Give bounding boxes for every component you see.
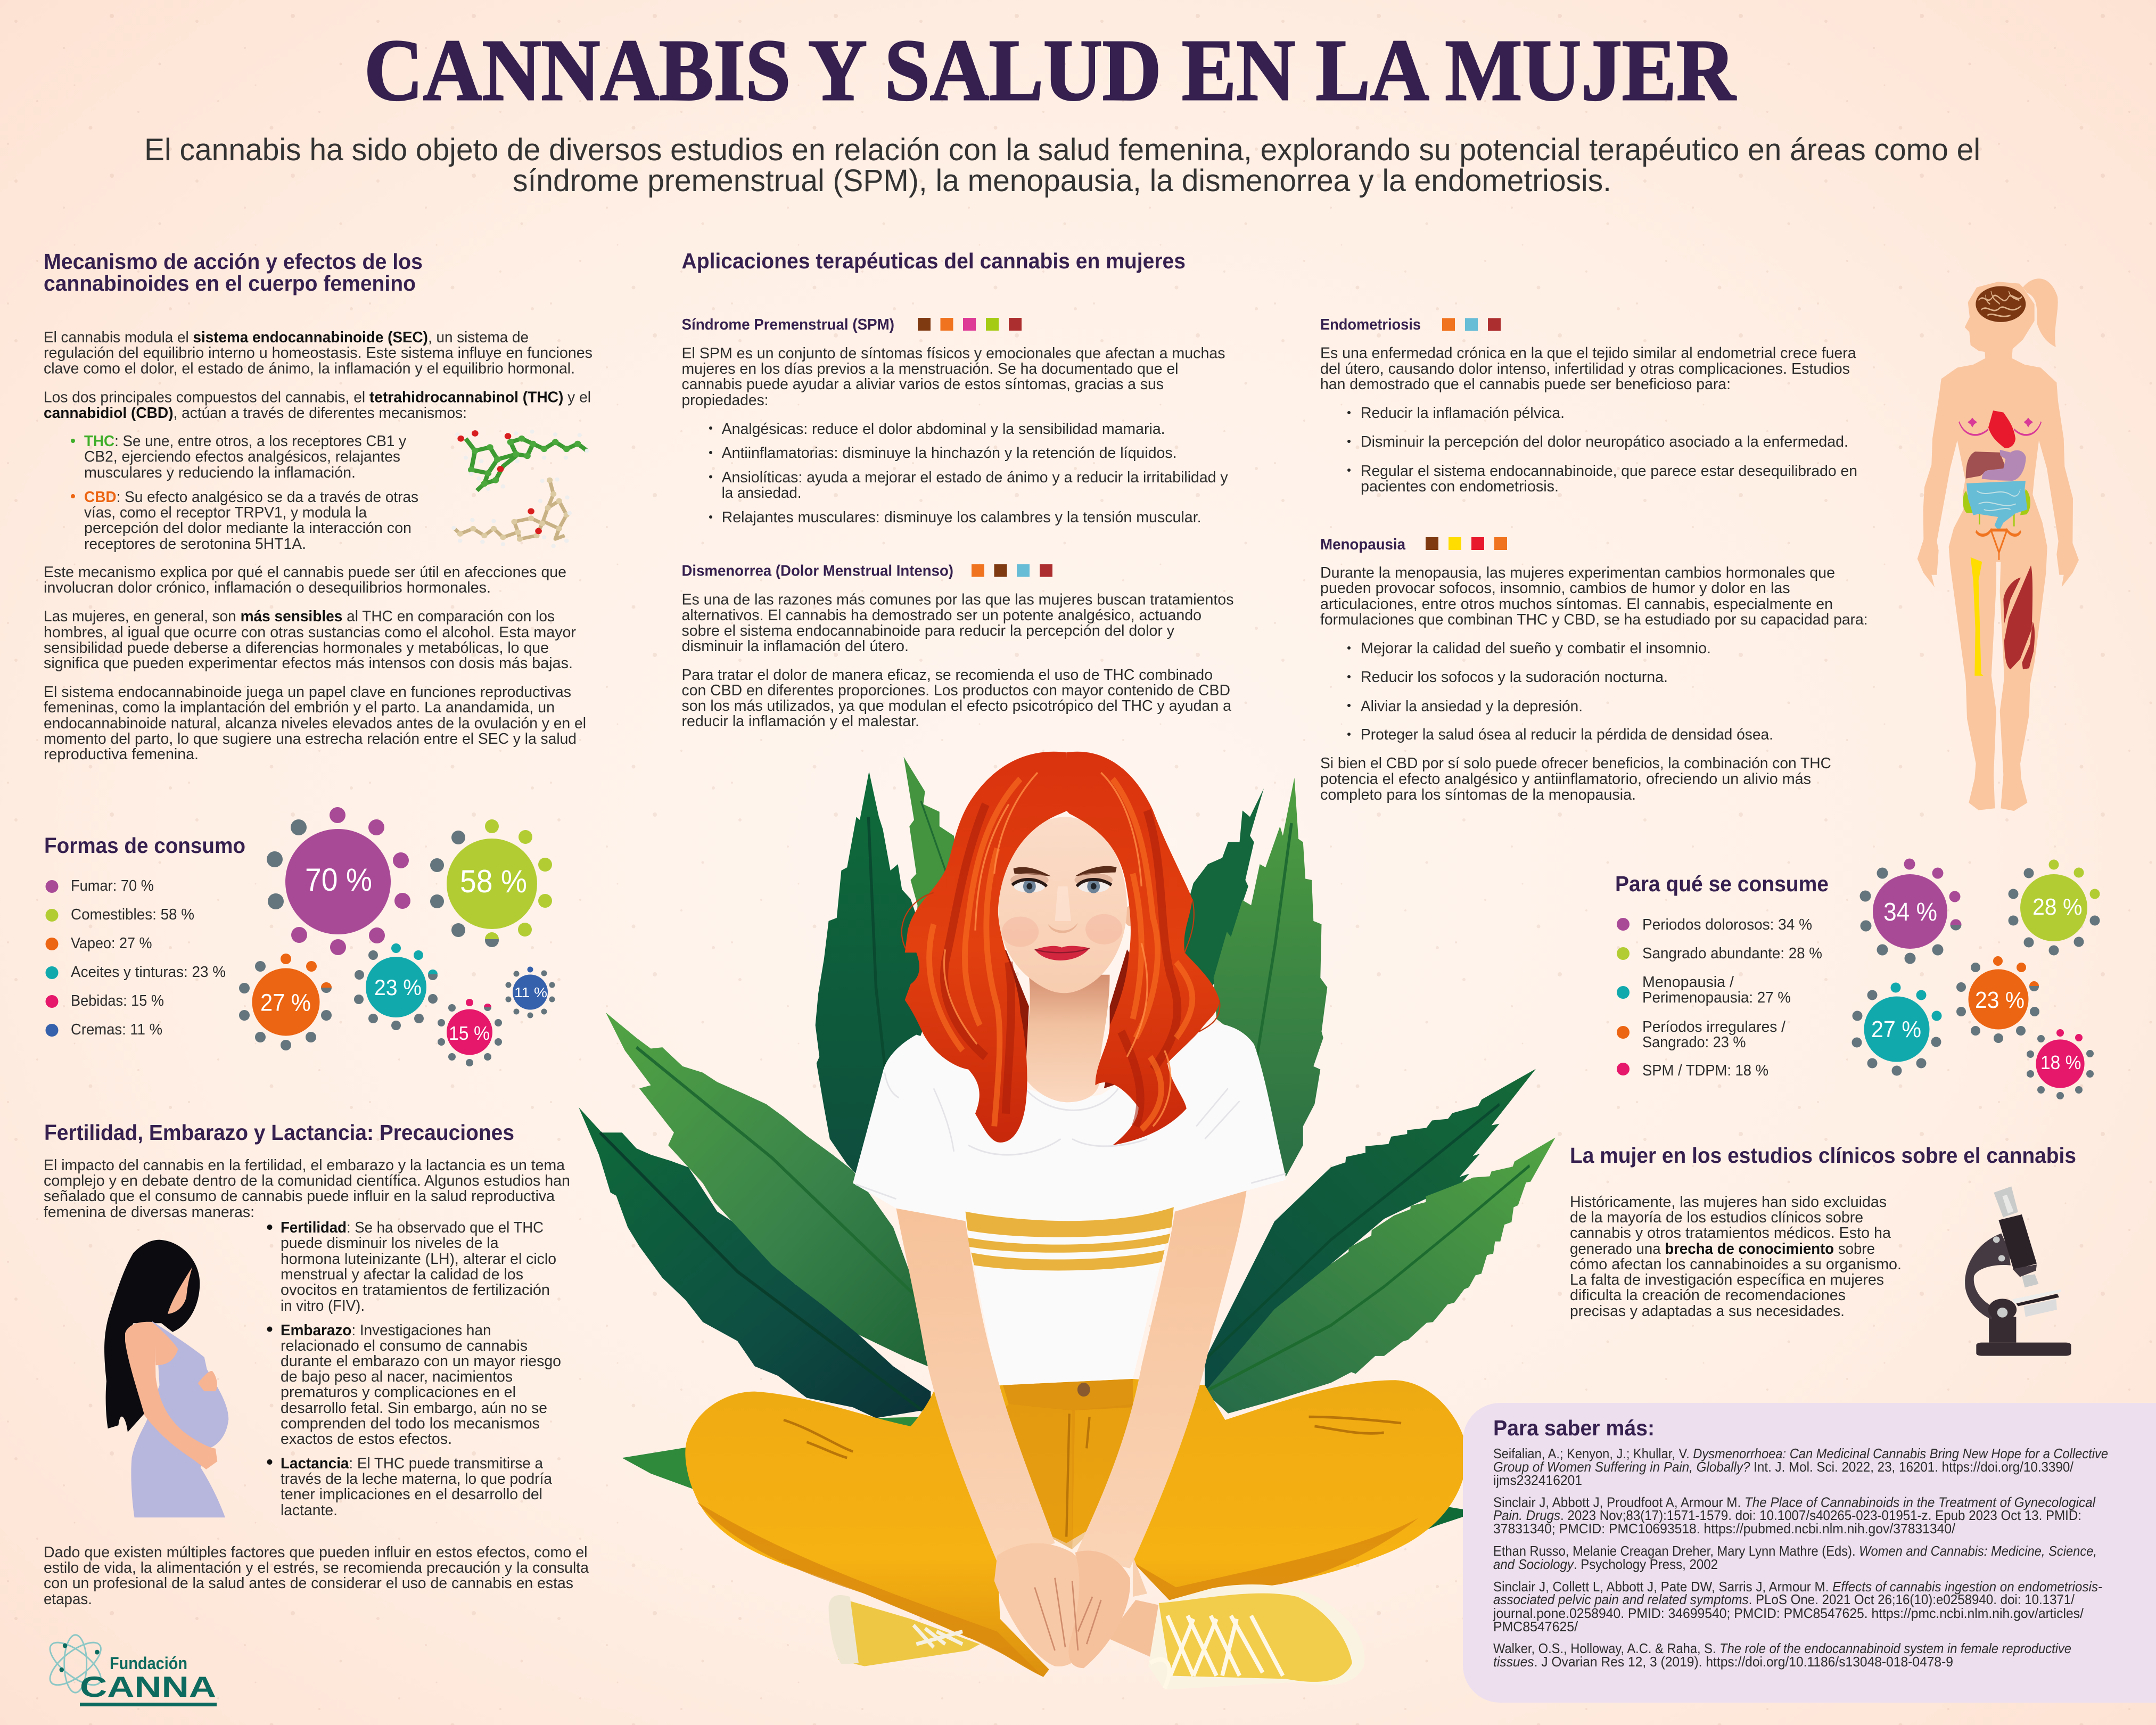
- list: Reducir los sofocos y la sudoración nocturna.: [1361, 669, 1668, 686]
- legend: Aceites y tinturas: 23 %: [71, 964, 226, 981]
- reference 4: journal.pone.0258940. PMID: 34699540; PMCID: PMC8547625. https://pmc.ncbi.nlm.nih.gov/articles/: [1493, 1605, 2084, 1621]
- heading: La mujer en los estudios clínicos sobre el cannabis: [1570, 1143, 2076, 1168]
- reference 2: [1493, 1494, 2096, 1537]
- text block: intro: El cannabis modula el sistema endocannabinoide (SEC), un sistema de: [44, 329, 529, 346]
- thigh muscles: [2003, 565, 2035, 669]
- bubble: 23 %: [1956, 956, 2039, 1043]
- femur: [1971, 557, 1984, 676]
- subtitle: síndrome premenstrual (SPM), la menopausia, la dismenorrea y la endometriosis.: [513, 163, 1611, 198]
- legend: SPM / TDPM: 18 %: [1642, 1062, 1768, 1079]
- bullet: Embarazo: desarrollo fetal. Sin embargo, aún no se: [281, 1400, 547, 1417]
- icon: microscope: [1965, 1186, 2071, 1356]
- lips: [1035, 946, 1090, 960]
- text block: [681, 591, 1234, 730]
- text block: reducir la inflamación y el malestar.: [681, 713, 919, 730]
- bullet: THC: musculares y reduciendo la inflamación.: [84, 464, 356, 481]
- list: Relajantes musculares: disminuye los calambres y la tensión muscular.: [722, 509, 1202, 526]
- text block: intro: [44, 1157, 570, 1221]
- hands: [994, 1543, 1130, 1668]
- leaf: dark upper left: [816, 771, 922, 1177]
- legend: Fumar: 70 %: [71, 877, 154, 894]
- reproductive organs: [1976, 530, 2021, 560]
- text block: de la mayoría de los estudios clínicos sobre: [1570, 1209, 1863, 1226]
- text block: intro: clave como el dolor, el estado de ánimo, la inflamación y el equilibrio hormonal.: [44, 360, 575, 377]
- text block: La falta de investigación específica en mujeres: [1570, 1271, 1884, 1288]
- kidneys: [1963, 489, 2030, 527]
- text block: recommendation: etapas.: [44, 1591, 92, 1608]
- reference 2: 37831340; PMCID: PMC10693518. https://pubmed.ncbi.nlm.nih.gov/37831340/: [1493, 1521, 1956, 1537]
- bubble: 27 %: [1851, 983, 1942, 1075]
- stomach: [1982, 450, 2026, 481]
- bullet: Embarazo: exactos de estos efectos.: [281, 1431, 452, 1448]
- brain: [1976, 286, 2026, 322]
- bubble: 28 %: [2008, 859, 2100, 955]
- reference 2: Sinclair J, Abbott J, Proudfoot A, Armour M. The Place of Cannabinoids in the Treatment of Gynecological: [1493, 1494, 2096, 1510]
- bullet: CBD: [71, 489, 418, 553]
- bubble: 70 %: 70 %: [305, 862, 372, 898]
- bullet: Fertilidad: [267, 1219, 556, 1315]
- list: Proteger la salud ósea al reducir la pérdida de densidad ósea.: [1361, 726, 1773, 743]
- text block: [681, 345, 1225, 409]
- heading: Para qué se consume: [1615, 872, 1829, 896]
- bullet: Fertilidad: menstrual y afectar la calidad de los: [281, 1266, 523, 1283]
- panel: forms of consumption: [44, 807, 555, 1066]
- text block: closing: [1320, 755, 1831, 803]
- text block: closing paragraphs: reproductiva femenina.: [44, 746, 199, 763]
- list: Reducir la inflamación pélvica.: [1361, 405, 1565, 422]
- text block: Durante la menopausia, las mujeres experimentan cambios hormonales que: [1320, 564, 1835, 581]
- legend: Vapeo: 27 %: [71, 935, 152, 952]
- bullet: Embarazo: comprenden del todo los mecanismos: [281, 1415, 540, 1432]
- text block: cómo afectan los cannabinoides a su organismo.: [1570, 1256, 1902, 1273]
- text block: intro: cannabidiol (CBD), actúan a través de diferentes mecanismos:: [44, 405, 467, 422]
- cheeks: [1002, 917, 1039, 947]
- text block: closing paragraphs: [44, 564, 586, 763]
- bubble: 23 %: 23 %: [1975, 987, 2025, 1013]
- panel: endometriosis: [1320, 316, 1857, 495]
- text block: closing paragraphs: femeninas, como la implantación del embrión y el parto. La anandamida, un: [44, 699, 555, 716]
- list: Antiinflamatorias: disminuye la hinchazón y la retención de líquidos.: [722, 445, 1177, 462]
- bullet: Fertilidad: ovocitos en tratamientos de fertilización: [281, 1282, 550, 1299]
- illustration: pregnant woman: [104, 1240, 228, 1517]
- subtitle: El cannabis ha sido objeto de diversos estudios en relación con la salud femenina, explorando su potencial terapéutico en áreas como el: [144, 133, 1980, 167]
- heading: [44, 249, 423, 295]
- panel: dysmenorrhea: [681, 563, 1234, 730]
- central illustration: cannabis leaves and seated woman: [579, 752, 1556, 1690]
- bullet: Embarazo: relacionado el consumo de cannabis: [281, 1337, 528, 1354]
- pants: [685, 1379, 1468, 1677]
- bubble: 34 %: 34 %: [1883, 898, 1937, 926]
- bubble: 58 %: [430, 819, 552, 947]
- list: [709, 421, 1228, 526]
- right leaves: [1205, 1069, 1556, 1544]
- heading: Formas de consumo: [44, 833, 245, 858]
- legend squares: [972, 564, 1052, 577]
- text block: Es una enfermedad crónica en la que el tejido similar al endometrial crece fuera: [1320, 345, 1856, 362]
- small leaves near the knees: [622, 1447, 694, 1490]
- ponytail: [2023, 278, 2058, 347]
- text block: recommendation: con un profesional de la salud antes de considerar el uso de cannabis en estas: [44, 1575, 573, 1592]
- bullet: CBD: percepción del dolor mediante la interacción con: [84, 520, 412, 537]
- icon: THC molecule: [455, 430, 589, 491]
- reference 1: Seifalian, A.; Kenyon, J.; Khullar, V. Dysmenorrhoea: Can Medicinal Cannabis Bring New Hope for a Collective: [1493, 1445, 2108, 1461]
- leaf: dark upper right: [1182, 788, 1264, 987]
- intestines: [1966, 481, 2027, 531]
- logo: Fundación CANNA: [44, 1635, 217, 1706]
- legend squares: [1442, 318, 1501, 331]
- legend: [1617, 916, 1822, 1079]
- text block: closing paragraphs: El sistema endocannabinoide juega un papel clave en funciones reproductivas: [44, 684, 571, 701]
- text block: intro: complejo y en debate dentro de la comunidad científica. Algunos estudios han: [44, 1172, 570, 1189]
- legend: Sangrado: 23 %: [1642, 1034, 1746, 1051]
- text block: pueden provocar sofocos, insomnio, cambios de humor y dolor en las: [1320, 580, 1790, 597]
- bullet: Fertilidad: hormona luteinizante (LH), alterar el ciclo: [281, 1251, 556, 1268]
- reference 1: Group of Women Suffering in Pain, Globally? Int. J. Mol. Sci. 2022, 23, 16201. https://doi.org/10.3390/: [1493, 1459, 2074, 1475]
- reference 3: and Sociology. Psychology Press, 2002: [1493, 1556, 1718, 1572]
- text block: closing: potencia el efecto analgésico y antiinflamatorio, ofreciendo un alivio más: [1320, 771, 1811, 788]
- heading: Mecanismo de acción y efectos de los: [44, 249, 423, 274]
- bullet: Lactancia: tener implicaciones en el desarrollo del: [281, 1486, 542, 1503]
- bullet: Fertilidad: in vitro (FIV).: [281, 1297, 365, 1315]
- legend: Perimenopausia: 27 %: [1642, 989, 1791, 1006]
- text block: intro: regulación del equilibrio interno u homeostasis. Este sistema influye en funciones: [44, 344, 593, 362]
- face: [988, 817, 1135, 993]
- list: Analgésicas: reduce el dolor abdominal y la sensibilidad mamaria.: [722, 421, 1165, 438]
- body silhouette: [1918, 282, 2079, 811]
- bullet: Embarazo: de bajo peso al nacer, nacimientos: [281, 1368, 513, 1385]
- list: [1347, 640, 1773, 743]
- icon: CBD molecule: [451, 478, 572, 548]
- panel: fertility, pregnancy and lactation: [44, 1120, 589, 1608]
- list: Regular el sistema endocannabinoide, que parece estar desequilibrado en: [1361, 463, 1857, 480]
- bubble: 15 %: 15 %: [449, 1022, 490, 1044]
- illustration: female body with organs: [1918, 278, 2079, 811]
- hair right: [1066, 752, 1220, 1145]
- bubble: 58 %: 58 %: [460, 864, 527, 899]
- legend: [46, 877, 226, 1038]
- leaf: dark lower left: [579, 1107, 931, 1418]
- shirt: [853, 1022, 1286, 1385]
- logo: Fundación CANNA: CANNA: [80, 1670, 216, 1703]
- liver: [1966, 451, 2006, 479]
- list: [1347, 405, 1857, 495]
- bubble: 23 %: 23 %: [374, 975, 422, 1000]
- reference 4: [1493, 1579, 2102, 1634]
- leaf: mid green upper right: [1214, 778, 1327, 1177]
- subtitle: [144, 133, 1980, 198]
- right shoe: [1148, 1584, 1364, 1690]
- text block: articulaciones, entre otros muchos síntomas. El cannabis, especialmente en: [1320, 596, 1833, 613]
- bubble: 23 %: [354, 943, 438, 1030]
- list: la ansiedad.: [722, 484, 802, 502]
- bullet: Fertilidad: puede disminuir los niveles de la: [281, 1235, 499, 1252]
- bubble: 70 %: [267, 807, 410, 955]
- text block: closing paragraphs: involucran dolor crónico, inflamación o desequilibrios hormonales.: [44, 579, 491, 596]
- arms: [896, 1209, 1055, 1562]
- text block: sobre el sistema endocannabinoide para reducir la percepción del dolor y: [681, 622, 1174, 639]
- heading: cannabinoides en el cuerpo femenino: [44, 271, 416, 295]
- eyes: [1014, 880, 1045, 893]
- bubble: 27 %: 27 %: [260, 989, 311, 1016]
- bullet: Embarazo: Embarazo: Investigaciones han: [281, 1322, 491, 1339]
- text block: Históricamente, las mujeres han sido excluidas: [1570, 1194, 1887, 1211]
- reference 3: [1493, 1543, 2097, 1572]
- reference 2: Pain. Drugs. 2023 Nov;83(17):1571-1579. doi: 10.1007/s40265-023-01951-z. Epub 2023 Oct 13. PMID:: [1493, 1507, 2081, 1523]
- bullet: Embarazo: prematuros y complicaciones en el: [281, 1384, 516, 1401]
- bullet: CBD: receptores de serotonina 5HT1A.: [84, 536, 306, 553]
- subheading: Menopausia: [1320, 536, 1406, 553]
- legend: Bebidas: 15 %: [71, 992, 164, 1009]
- text block: mujeres en los días previos a la menstruación. Se ha documentado que el: [681, 360, 1179, 377]
- reference 4: Sinclair J, Collett L, Abbott J, Pate DW, Sarris J, Armour M. Effects of cannabis ingestion on endometriosis-: [1493, 1579, 2102, 1595]
- text block: Es una de las razones más comunes por las que las mujeres buscan tratamientos: [681, 591, 1234, 608]
- legend: Menopausia /: [1642, 974, 1734, 991]
- shin: [1107, 1600, 1165, 1663]
- panel: women in clinical studies: [1570, 1143, 2076, 1356]
- leaf: light small top left: [904, 757, 962, 949]
- panel: SPM: [681, 316, 1228, 526]
- text block: han demostrado que el cannabis puede ser beneficioso para:: [1320, 376, 1731, 393]
- bullet: CBD: CBD: Su efecto analgésico se da a través de otras: [84, 489, 418, 506]
- text block: closing paragraphs: momento del parto, lo que sugiere una estrecha relación entre el SEC y la salud: [44, 730, 577, 748]
- bullet: THC: CB2, ejerciendo efectos analgésicos, relajantes: [84, 448, 400, 465]
- subheading: Endometriosis: [1320, 316, 1421, 333]
- shirt stripes: [966, 1207, 1174, 1237]
- text block: recommendation: Dado que existen múltiples factores que pueden influir en estos efectos, como el: [44, 1544, 588, 1561]
- subheading: Dismenorrea (Dolor Menstrual Intenso): [681, 563, 953, 580]
- panel: mechanism of action: [44, 249, 593, 763]
- text block: cannabis y otros tratamientos médicos. Esto ha: [1570, 1225, 1891, 1242]
- heading: Para saber más:: [1493, 1416, 1655, 1440]
- legend squares: [918, 318, 1022, 331]
- text block: recommendation: estilo de vida, la alimentación y el estrés, se recomienda precaución y la consulta: [44, 1559, 589, 1576]
- text block: son los más utilizados, ya que modulan el efecto psicotrópico del THC y ayudan a: [681, 697, 1232, 714]
- text block: intro: El impacto del cannabis en la fertilidad, el embarazo y la lactancia es un tema: [44, 1157, 565, 1174]
- bullet: Lactancia: lactante.: [281, 1502, 338, 1519]
- legend squares: [1426, 537, 1507, 550]
- heart: [1988, 410, 2015, 448]
- panel: reasons for use: [1615, 858, 2100, 1099]
- text block: intro: [44, 329, 593, 422]
- list: Disminuir la percepción del dolor neuropático asociado a la enfermedad.: [1361, 433, 1848, 450]
- bubble: 34 %: [1860, 858, 1961, 964]
- text block: closing paragraphs: Este mecanismo explica por qué el cannabis puede ser útil en afecciones que: [44, 564, 566, 581]
- text block: intro: femenina de diversas maneras:: [44, 1204, 254, 1221]
- bullet: Embarazo: [267, 1322, 561, 1448]
- hair left: [905, 752, 1067, 1143]
- text block: precisas y adaptadas a sus necesidades.: [1570, 1303, 1845, 1320]
- hair strands: [944, 804, 1178, 1126]
- bubble: 18 %: [2027, 1029, 2094, 1099]
- bubble: 11 %: [506, 967, 555, 1018]
- text block: closing paragraphs: hombres, al igual que ocurre con otras sustancias como el alcohol. Esta mayor: [44, 624, 576, 641]
- hair back shadow: [980, 949, 1029, 1095]
- logo: Fundación CANNA: Fundación: [110, 1654, 187, 1673]
- text block: closing: completo para los síntomas de la menopausia.: [1320, 786, 1636, 803]
- reference 3: Ethan Russo, Melanie Creagan Dreher, Mary Lynn Mathre (Eds). Women and Cannabis: Medicine, Science,: [1493, 1543, 2097, 1559]
- bullet: THC: [71, 433, 406, 481]
- text block: disminuir la inflamación del útero.: [681, 638, 909, 655]
- leaf: green left: [606, 1013, 928, 1366]
- panel: references: [1463, 1403, 2156, 1703]
- legend: Sangrado abundante: 28 %: [1642, 945, 1822, 962]
- bubble: 27 %: 27 %: [1871, 1016, 1921, 1042]
- bubble: 28 %: 28 %: [2032, 894, 2083, 920]
- text block: El SPM es un conjunto de síntomas físicos y emocionales que afectan a muchas: [681, 345, 1225, 362]
- text block: closing paragraphs: significa que pueden experimentar efectos más intensos con dosis más bajas.: [44, 655, 573, 672]
- subheading: Síndrome Premenstrual (SPM): [681, 316, 894, 333]
- text block: closing: Si bien el CBD por sí solo puede ofrecer beneficios, la combinación con THC: [1320, 755, 1831, 772]
- text block: con CBD en diferentes proporciones. Los productos con mayor contenido de CBD: [681, 682, 1230, 699]
- reference 5: [1493, 1640, 2071, 1670]
- legend: Períodos irregulares /: [1642, 1018, 1786, 1036]
- bubble: 11 %: 11 %: [514, 984, 547, 1000]
- panel: therapeutic applications heading: Aplicaciones terapéuticas del cannabis en mujeres: [681, 249, 1186, 273]
- bubble: 15 %: [438, 999, 502, 1066]
- text block: closing paragraphs: endocannabinoide natural, alcanza niveles elevados antes de la ovulación y en el: [44, 715, 586, 732]
- text block: closing paragraphs: sensibilidad puede deberse a diferencias hormonales y metabólicas, lo que: [44, 639, 549, 656]
- bullet: Lactancia: Lactancia: El THC puede transmitirse a: [281, 1455, 544, 1472]
- heading: Fertilidad, Embarazo y Lactancia: Precauciones: [44, 1120, 514, 1145]
- bubble: 27 %: [239, 954, 332, 1050]
- eyebrows: [1014, 866, 1117, 876]
- bullet: CBD: vías, como el receptor TRPV1, y modula la: [84, 504, 367, 521]
- bullet: THC: THC: Se une, entre otros, a los receptores CB1 y: [84, 433, 406, 450]
- text block: propiedades:: [681, 392, 769, 409]
- text block: cannabis puede ayudar a aliviar varios de estos síntomas, gracias a sus: [681, 376, 1164, 393]
- legend: Periodos dolorosos: 34 %: [1642, 916, 1812, 933]
- title: CANNABIS Y SALUD EN LA MUJER: [364, 21, 1737, 119]
- reference 4: PMC8547625/: [1493, 1619, 1578, 1634]
- list: Aliviar la ansiedad y la depresión.: [1361, 698, 1583, 715]
- text block: generado una brecha de conocimiento sobre: [1570, 1241, 1875, 1258]
- text block: [1570, 1194, 1902, 1320]
- bullet: Fertilidad: Fertilidad: Se ha observado que el THC: [281, 1219, 544, 1236]
- bullet: Lactancia: [267, 1455, 553, 1519]
- text block: [1320, 345, 1856, 393]
- legend: Comestibles: 58 %: [71, 906, 194, 923]
- text block: alternativos. El cannabis ha demostrado ser un potente analgésico, actuando: [681, 607, 1202, 624]
- panel: menopause: [1320, 536, 1868, 803]
- small leaf tip bottom right: [1391, 1505, 1478, 1544]
- reference 1: ijms232416201: [1493, 1472, 1582, 1488]
- text block: [1320, 564, 1868, 628]
- text block: del útero, causando dolor intenso, infertilidad y otras complicaciones. Estudios: [1320, 360, 1850, 377]
- neck: [1017, 975, 1110, 1102]
- list: Ansiolíticas: ayuda a mejorar el estado de ánimo y a reducir la irritabilidad y: [722, 469, 1228, 486]
- reference 4: associated pelvic pain and related symptoms. PLoS One. 2021 Oct 26;16(10):e0258940. doi: 10.1371/: [1493, 1591, 2075, 1607]
- text block: Para tratar el dolor de manera eficaz, se recomienda el uso de THC combinado: [681, 667, 1213, 684]
- left shoe: [829, 1595, 980, 1666]
- text block: intro: señalado que el consumo de cannabis puede influir en la salud reproductiva: [44, 1188, 555, 1205]
- reference 5: Walker, O.S., Holloway, A.C. & Raha, S. The role of the endocannabinoid system in female reproductive: [1493, 1640, 2071, 1656]
- eye shadow: [1010, 873, 1049, 887]
- bubble: 18 %: 18 %: [2040, 1052, 2081, 1073]
- bullet: Lactancia: través de la leche materna, lo que podría: [281, 1471, 553, 1488]
- reference 1: [1493, 1445, 2108, 1488]
- list: pacientes con endometriosis.: [1361, 478, 1559, 495]
- reference 5: tissues. J Ovarian Res 12, 3 (2019). https://doi.org/10.1186/s13048-018-0478-9: [1493, 1654, 1953, 1670]
- breast glands: [1959, 417, 2041, 435]
- bullet: Embarazo: durante el embarazo con un mayor riesgo: [281, 1353, 561, 1370]
- text block: recommendation: [44, 1544, 589, 1608]
- text block: dificulta la creación de recomendaciones: [1570, 1287, 1846, 1304]
- text block: formulaciones que combinan THC y CBD, se ha estudiado por su capacidad para:: [1320, 611, 1868, 628]
- text block: intro: Los dos principales compuestos del cannabis, el tetrahidrocannabinol (THC) y el: [44, 389, 591, 406]
- list: Mejorar la calidad del sueño y combatir el insomnio.: [1361, 640, 1711, 657]
- text block: closing paragraphs: Las mujeres, en general, son más sensibles al THC en comparación con los: [44, 608, 555, 625]
- nose: [1048, 923, 1078, 933]
- legend: Cremas: 11 %: [71, 1021, 162, 1038]
